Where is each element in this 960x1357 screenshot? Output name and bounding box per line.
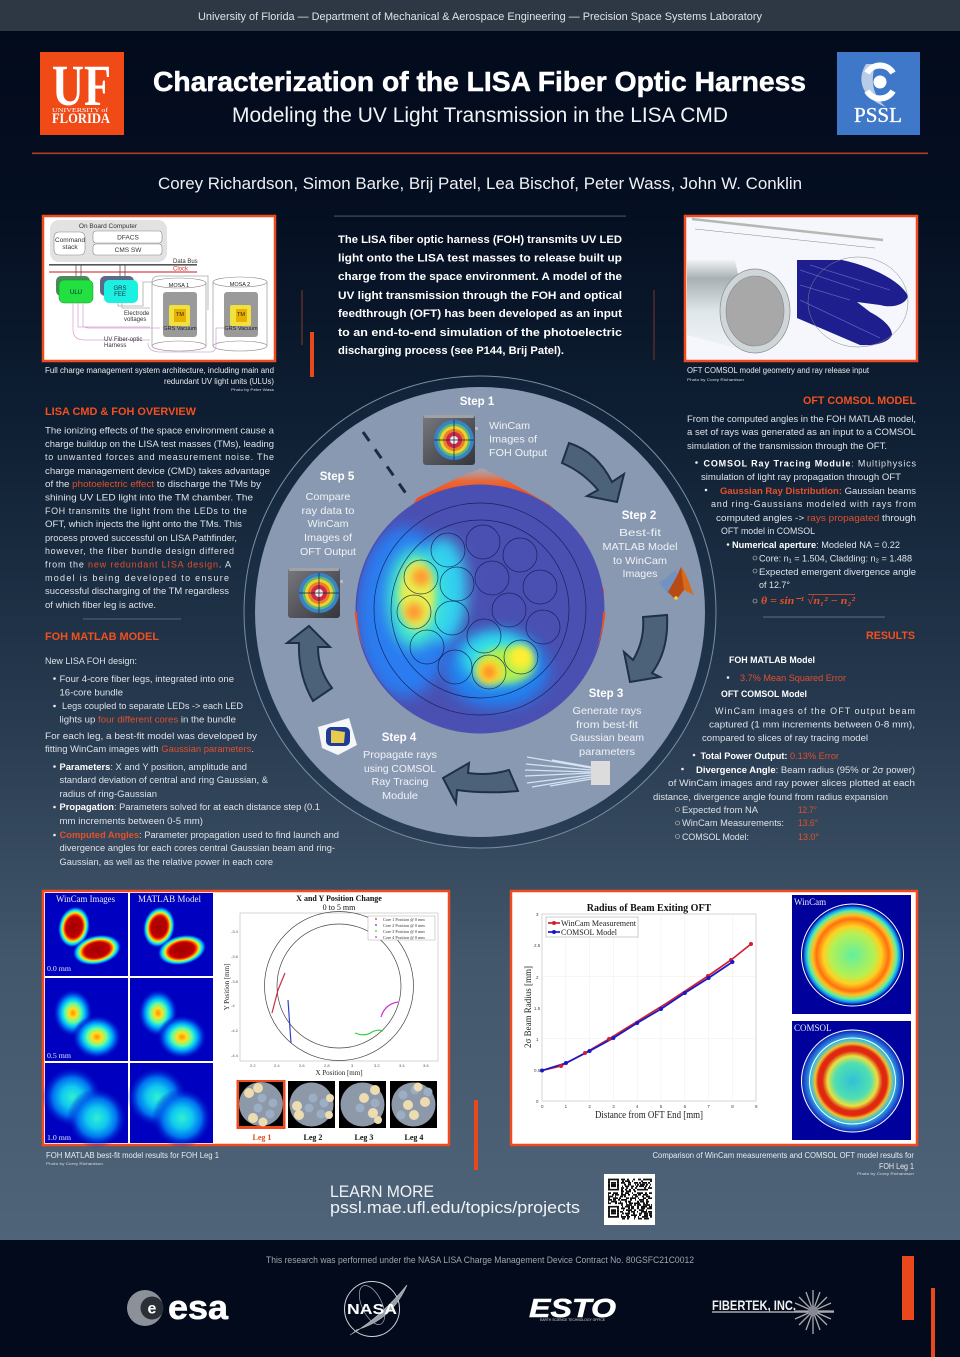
model body text: For each leg, a best-fit model was developed by xyxy=(45,731,258,741)
overview body text: however, the fiber bundle design differed xyxy=(45,546,234,556)
step 5: Compare xyxy=(306,491,351,503)
logo: PSSL xyxy=(837,52,920,135)
overview body text: from the new redundant LISA design. A xyxy=(45,560,231,570)
model body text: standard deviation of central and ring Gaussian, & xyxy=(60,775,268,785)
model body text: divergence angles for each cores central Gaussian beam and ring- xyxy=(60,843,335,853)
chart: radius of beam exiting OFT: Distance from OFT End [mm] xyxy=(595,1110,703,1121)
logo: University of Florida xyxy=(40,52,124,135)
model body text: Four 4-core fiber legs, integrated into one xyxy=(60,674,234,684)
step 3: parameters xyxy=(579,746,635,758)
step 5: Images of xyxy=(304,532,352,544)
icon: WinCam camera step 5 xyxy=(288,568,343,618)
panel: OFT COMSOL model geometry xyxy=(685,216,917,361)
chart: X and Y position change: -3.6 xyxy=(231,954,239,959)
chart: radius of beam exiting OFT: 4 xyxy=(636,1104,639,1109)
panel: charge management architecture diagram: TM xyxy=(176,312,184,318)
panel: charge management architecture diagram: GRS Vacuum xyxy=(224,326,258,332)
chart: radius of beam exiting OFT: 1 xyxy=(536,1037,539,1042)
footer band xyxy=(0,1240,960,1357)
model body text: a set of rays was generated as an input to a COMSOL xyxy=(687,427,916,437)
panel: charge management architecture diagram: On Board Computer xyxy=(79,223,138,230)
panel: charge management architecture diagram: stack xyxy=(62,244,78,251)
chart: X and Y position change: X Position [mm] xyxy=(315,1069,363,1077)
logo: University of Florida: UNIVERSITY of xyxy=(52,107,108,114)
results body text: WinCam Measurements: xyxy=(682,818,784,828)
chart: X and Y position change: 2.4 xyxy=(274,1063,280,1068)
abstract text block: The LISA fiber optic harness (FOH) transmits UV LED xyxy=(338,234,622,246)
step 4: Step 4 xyxy=(382,732,417,744)
model body text: and ring-Gaussians modeled with rays from xyxy=(711,499,916,509)
chart: X and Y position change: -4.4 xyxy=(231,1053,239,1058)
chart: X and Y position change: Core 3 Position @ 0 mm xyxy=(383,929,425,934)
caption: OFT COMSOL model: Photo by Corey Richardson xyxy=(687,377,744,382)
heat map: central fiber bundle image xyxy=(350,468,610,740)
overview body text: of the photoelectric effect to discharge the TMs by xyxy=(45,479,262,489)
chart: radius of beam exiting OFT: 9 xyxy=(755,1104,758,1109)
step 4: using COMSOL xyxy=(364,763,436,775)
abstract text block: discharging process (see P144, Brij Patel). xyxy=(338,345,564,357)
heat maps: WinCam and MATLAB images: MATLAB Model xyxy=(138,894,202,904)
heading: FOH MATLAB MODEL xyxy=(45,631,159,643)
learn more link: LEARN MORE xyxy=(330,1183,434,1201)
icon: MATLAB membrane xyxy=(659,567,694,600)
heading: OFT COMSOL MODEL xyxy=(803,395,916,407)
step 3: from best-fit xyxy=(576,719,638,731)
model body text xyxy=(45,656,339,867)
overview body text: successful discharging of the TM regardless xyxy=(45,586,230,596)
chart: radius of beam exiting OFT: 5 xyxy=(660,1104,663,1109)
panel: charge management architecture diagram: FEE xyxy=(114,292,126,298)
chart: radius of beam exiting OFT: 2σ Beam Radius [mm] xyxy=(523,966,533,1048)
panel: beam radius comparison xyxy=(511,891,917,1145)
abstract text block xyxy=(334,216,626,357)
results body text: COMSOL Model: xyxy=(682,832,749,842)
panel: LISA CMD and FOH overview xyxy=(45,406,274,610)
panel: charge management architecture diagram: MOSA 1 xyxy=(169,283,189,289)
logo: Fibertek xyxy=(712,1290,834,1334)
abstract text block: charge from the space environment. A model of the xyxy=(338,271,622,283)
step 1: Images of xyxy=(489,434,537,446)
panel: charge management architecture diagram: GRS xyxy=(113,286,127,292)
chart: radius of beam exiting OFT: 1.5 xyxy=(534,1006,541,1011)
model body text xyxy=(687,414,917,603)
step 2: MATLAB Model xyxy=(602,541,678,553)
image: COMSOL beam xyxy=(792,1021,911,1140)
chart: X and Y position change: Y Position [mm] xyxy=(223,964,231,1010)
chart: X and Y position change: 3.2 xyxy=(374,1063,380,1068)
panel: charge management architecture diagram: Harness xyxy=(104,343,126,349)
logo: University of Florida: UF xyxy=(52,53,111,118)
step 3 xyxy=(570,688,644,758)
overview body text: to unwanted forces and measurement noise. The xyxy=(45,452,274,462)
panel: FOH MATLAB best-fit results xyxy=(42,891,449,1148)
results body text: 3.7% Mean Squared Error xyxy=(740,673,846,683)
overview body text xyxy=(45,426,274,610)
step 1: FOH Output xyxy=(489,447,547,459)
results body text xyxy=(653,655,915,842)
chart: radius of beam exiting OFT: 1 xyxy=(565,1104,568,1109)
chart: radius of beam exiting OFT: 2 xyxy=(536,975,539,980)
model body text: computed angles -> rays propagated through xyxy=(716,513,916,523)
chart: radius of beam exiting OFT: 6 xyxy=(684,1104,687,1109)
step 2: Images xyxy=(622,568,658,580)
chart: X and Y position change: X and Y Position Change xyxy=(296,894,382,903)
step 4: Propagate rays xyxy=(363,749,437,761)
caption: architecture diagram xyxy=(45,366,274,392)
chart: X and Y position change: -3.8 xyxy=(231,979,239,984)
overview body text: OFT, which injects the light onto the TMs. This xyxy=(45,519,243,529)
overview body text: charge management device (CMD) takes advantage xyxy=(45,466,270,476)
step 5: OFT Output xyxy=(300,546,356,558)
chart: radius of beam exiting OFT: 2 xyxy=(588,1104,591,1109)
panel: charge management architecture diagram: UV Fiber-optic xyxy=(104,337,142,343)
model body text: fitting WinCam images with Gaussian parameters . xyxy=(45,744,254,754)
panel: charge management architecture diagram: Command xyxy=(55,237,85,244)
arrow: step 4 to step 5 xyxy=(287,626,332,701)
step 3: Gaussian beam xyxy=(570,732,644,744)
images: fiber bundle legs: Leg 3 xyxy=(355,1133,373,1142)
chart: radius of beam exiting OFT: 7 xyxy=(707,1104,710,1109)
model body text: simulation of light ray propagation through OFT xyxy=(701,472,902,482)
panel: charge management architecture diagram: Electrode xyxy=(124,311,150,317)
image: COMSOL beam: COMSOL xyxy=(794,1023,832,1033)
caption: MATLAB results xyxy=(46,1151,220,1166)
step 3: Step 3 xyxy=(589,688,623,700)
model body text: New LISA FOH design: xyxy=(45,656,137,666)
heading: LISA CMD & FOH OVERVIEW xyxy=(45,406,197,418)
chart: X and Y position change: 2.6 xyxy=(299,1063,305,1068)
results body text: 12.7° xyxy=(798,805,817,815)
caption: beam comparison: FOH Leg 1 xyxy=(879,1162,914,1171)
top institution bar: University of Florida — Department of Mechanical & Aerospace Engineering — Precision Space Systems Laboratory xyxy=(198,11,762,23)
contract note: This research was performed under the NASA LISA Charge Management Device Contract No. 80GSFC21C0012 xyxy=(266,1255,694,1266)
chart: X and Y position change: Core 2 Position @ 0 mm xyxy=(383,923,425,928)
step 5: ray data to xyxy=(302,505,355,517)
QR code xyxy=(604,1174,655,1225)
step 2: to WinCam xyxy=(613,555,667,567)
chart: X and Y position change: -4.2 xyxy=(231,1028,239,1033)
learn more link: pssl.mae.ufl.edu/topics/projects xyxy=(330,1199,580,1217)
chart: radius of beam exiting OFT: 0 xyxy=(536,1099,539,1104)
model body text: Gaussian, as well as the relative power in each core xyxy=(60,857,273,867)
model body text: Numerical aperture: Modeled NA = 0.22 xyxy=(732,540,900,550)
logo: PSSL: PSSL xyxy=(854,103,902,127)
chart: radius of beam exiting OFT: COMSOL Model xyxy=(561,927,618,937)
step 2: Step 2 xyxy=(622,510,656,522)
logo: esa xyxy=(127,1289,229,1327)
model body text: simulation of the transmission through the OFT. xyxy=(687,441,887,451)
model body text: mm increments between 0-5 mm) xyxy=(60,816,203,826)
model body text: Propagation: Parameters solved for at each distance step (0.1 xyxy=(60,802,320,812)
chart: X and Y position change: 2.8 xyxy=(324,1063,330,1068)
chart: radius of beam exiting OFT: 0.5 xyxy=(534,1068,541,1073)
caption: beam comparison: Comparison of WinCam measurements and COMSOL OFT model results for xyxy=(652,1151,914,1160)
results body text: Total Power Output: 0.13% Error xyxy=(700,751,839,761)
chart: radius of beam exiting OFT: 0 xyxy=(541,1104,544,1109)
chart: radius of beam exiting OFT: 3 xyxy=(612,1104,615,1109)
results body text: of WinCam images and ray power slices plotted at each xyxy=(668,778,915,788)
arrow: step 1 to step 2 xyxy=(562,443,624,502)
chart: radius of beam exiting OFT: 8 xyxy=(731,1104,734,1109)
chart: X and Y position change: -3.4 xyxy=(231,929,239,934)
model body text: 16-core bundle xyxy=(60,688,123,698)
caption: MATLAB results: FOH MATLAB best-fit model results for FOH Leg 1 xyxy=(46,1151,220,1160)
abstract text block: feedthrough (OFT) has been developed as an input xyxy=(338,308,622,320)
step 2: Best-fit xyxy=(619,527,661,539)
overview body text: model is being developed to ensure xyxy=(45,573,229,583)
logo: University of Florida: FLORIDA xyxy=(52,111,110,127)
model body text: radius of ring-Gaussian xyxy=(60,789,157,799)
chart: X and Y position change: Core 1 Position @ 0 mm xyxy=(383,917,425,922)
logo: esa: esa xyxy=(168,1289,229,1327)
step 1: WinCam xyxy=(489,420,530,432)
panel: charge management architecture diagram: Data Bus xyxy=(173,259,198,265)
step 5: WinCam xyxy=(308,518,349,530)
model body text: Core: n₁ = 1.504, Cladding: n₂ = 1.488 xyxy=(759,554,912,564)
chart: radius of beam exiting OFT: 2.5 xyxy=(534,943,541,948)
chart: X and Y position change: 3 xyxy=(351,1063,354,1068)
heat maps: WinCam and MATLAB images: 0.5 mm xyxy=(47,1051,71,1060)
images: fiber bundle legs: Leg 1 xyxy=(253,1133,271,1142)
model body text: Computed Angles : Parameter propagation used to find launch and xyxy=(60,830,339,840)
results body text: 13.6° xyxy=(798,818,818,828)
chart: X and Y position change: 2.2 xyxy=(250,1063,256,1068)
results body text: distance, divergence angle found from radius expansion xyxy=(653,792,888,802)
panel: OFT COMSOL model text xyxy=(687,395,917,607)
results body text: Divergence Angle : Beam radius (95% or 2σ power) xyxy=(696,765,915,775)
step 4: Module xyxy=(382,790,418,802)
overview body text: of which fiber leg is active. xyxy=(45,600,156,610)
logo: Fibertek: FIBERTEK, INC. xyxy=(712,1297,796,1313)
chart: X and Y position change: Core 4 Position @ 0 mm xyxy=(383,935,425,940)
model body text: Parameters: X and Y position, amplitude and xyxy=(60,762,247,772)
model body text: OFT model in COMSOL xyxy=(721,526,815,536)
caption: MATLAB results: Photo by Corey Richardson xyxy=(46,1161,103,1166)
panel: charge management architecture diagram: TM xyxy=(237,312,245,318)
chart: X and Y position change: 3.4 xyxy=(399,1063,405,1068)
caption: architecture diagram: redundant UV light units (ULUs) xyxy=(164,377,274,386)
caption: architecture diagram: Photo by Peter Wass xyxy=(231,387,274,392)
step 1 xyxy=(460,396,547,459)
results body text: OFT COMSOL Model xyxy=(721,689,807,699)
logo: esa: e xyxy=(148,1300,157,1318)
authors: Corey Richardson, Simon Barke, Brij Patel, Lea Bischof, Peter Wass, John W. Conklin xyxy=(158,175,802,193)
heat maps: WinCam and MATLAB images: 1.0 mm xyxy=(47,1133,71,1142)
images: fiber bundle legs: Leg 4 xyxy=(405,1133,423,1142)
logo: NASA: NASA xyxy=(347,1301,397,1318)
overview body text: The ionizing effects of the space environment cause a xyxy=(45,426,274,436)
heat maps: WinCam and MATLAB images xyxy=(42,893,213,1148)
subtitle: Modeling the UV Light Transmission in the LISA CMD xyxy=(232,104,728,127)
model body text: From the computed angles in the FOH MATLAB model, xyxy=(687,414,916,424)
panel: charge management architecture diagram: voltages xyxy=(124,317,146,323)
results body text: 13.0° xyxy=(798,832,819,842)
step 5: Step 5 xyxy=(320,471,355,483)
images: fiber bundle legs xyxy=(236,1080,437,1142)
panel: charge management architecture diagram: CMS SW xyxy=(115,247,142,254)
panel: charge management architecture diagram: DFACS xyxy=(117,234,139,242)
step 4: Ray Tracing xyxy=(372,776,429,788)
heading: RESULTS xyxy=(866,630,915,642)
icon: COMSOL logo xyxy=(318,718,357,755)
results body text: captured (1 mm increments between 0-8 mm), xyxy=(709,720,915,730)
icon: dashed divider between step 5 and step 1 xyxy=(363,432,407,495)
images: fiber bundle legs: Leg 2 xyxy=(304,1133,322,1142)
chart: radius of beam exiting OFT: WinCam Measurement xyxy=(561,918,637,928)
step 4 xyxy=(363,732,437,802)
heat maps: WinCam and MATLAB images: WinCam Images xyxy=(56,894,115,904)
overview body text: shining UV LED light into the TM chamber. The xyxy=(45,492,253,502)
image: WinCam beam: WinCam xyxy=(794,897,826,907)
heat maps: WinCam and MATLAB images: 0.0 mm xyxy=(47,964,71,973)
icon: WinCam camera step 1 xyxy=(423,415,478,465)
panel: charge management architecture diagram: Clock xyxy=(173,266,189,272)
abstract text block: UV light transmission through the FOH and optical xyxy=(338,290,622,302)
model body text: Legs coupled to separate LEDs -> each LED xyxy=(62,701,243,711)
step 1: Step 1 xyxy=(460,396,495,408)
step 5 xyxy=(300,471,356,558)
image: WinCam beam xyxy=(792,895,911,1014)
panel: charge management architecture diagram: MOSA 2 xyxy=(230,282,250,288)
results body text: compared to slices of ray tracing model xyxy=(702,733,868,743)
caption: architecture diagram: Full charge management system architecture, including main and xyxy=(45,366,274,375)
results body text: Expected from NA xyxy=(682,805,758,815)
caption: beam comparison xyxy=(652,1151,914,1176)
results body text: WinCam images of the OFT output beam xyxy=(715,706,915,716)
results body text: FOH MATLAB Model xyxy=(729,655,815,665)
panel: FOH MATLAB model xyxy=(45,631,339,867)
chart: radius of beam exiting OFT: Radius of Beam Exiting OFT xyxy=(587,903,712,914)
model body text: Expected emergent divergence angle xyxy=(759,567,916,577)
caption: OFT COMSOL model xyxy=(687,366,870,382)
model body text: COMSOL Ray Tracing Module: Multiphysics xyxy=(704,458,916,468)
model body text: Gaussian Ray Distribution: Gaussian beams xyxy=(720,486,917,496)
title: Characterization of the LISA Fiber Optic Harness xyxy=(153,66,806,97)
abstract text block: light onto the LISA test masses to release built up xyxy=(338,252,622,264)
chart: X and Y position change: -4 xyxy=(231,1003,235,1008)
chart: radius of beam exiting OFT: 3 xyxy=(536,912,539,917)
step 3: Generate rays xyxy=(572,705,642,717)
chart: radius of beam exiting OFT xyxy=(523,903,758,1121)
overview body text: charge buildup on the LISA test masses (TMs), leading xyxy=(45,439,274,449)
chart: X and Y position change: 0 to 5 mm xyxy=(323,903,356,912)
logo: ESTO: EARTH SCIENCE TECHNOLOGY OFFICE xyxy=(540,1318,606,1322)
panel: charge management architecture diagram: ULU xyxy=(70,290,82,296)
model body text: lights up four different cores in the bundle xyxy=(60,714,236,724)
icon: ray bundle and detector xyxy=(525,757,610,787)
model body text: of 12.7° xyxy=(759,580,790,590)
logo: NASA xyxy=(344,1282,407,1336)
top institution bar xyxy=(0,0,960,31)
logo: ESTO: ESTO xyxy=(529,1293,616,1323)
panel: results xyxy=(653,630,915,842)
arrow: step 3 to step 4 xyxy=(443,763,518,803)
caption: beam comparison: Photo by Corey Richardson xyxy=(857,1171,914,1176)
step 2 xyxy=(602,510,678,580)
chart: X and Y position change: 3.6 xyxy=(423,1063,429,1068)
arrow: step 2 to step 3 xyxy=(624,615,667,682)
panel: charge management architecture diagram xyxy=(43,216,275,361)
chart: X and Y position change xyxy=(223,894,438,1077)
abstract text block: to an end-to-end simulation of the photoelectric xyxy=(338,327,622,339)
overview body text: process proved successful on LISA Pathfinder, xyxy=(45,533,237,543)
learn more link xyxy=(330,1183,580,1217)
formula: divergence angle: θ = sin⁻¹ √n₁² − n₂² xyxy=(761,595,856,607)
overview body text: FOH transmits the light from the LEDs to the xyxy=(45,506,247,516)
panel: charge management architecture diagram: GRS Vacuum xyxy=(163,326,197,332)
caption: OFT COMSOL model: OFT COMSOL model geometry and ray release input xyxy=(687,366,870,375)
panel: five-step process wheel xyxy=(244,376,716,848)
